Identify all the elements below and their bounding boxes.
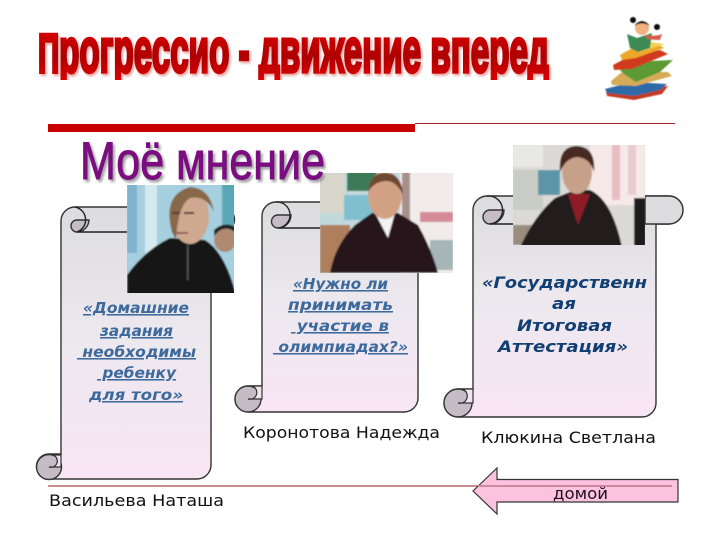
scarf — [646, 34, 662, 40]
red book — [613, 50, 668, 70]
photo: Светлана — [511, 143, 647, 248]
panel: scroll 1: ребенку — [97, 364, 177, 382]
icon: girl reading on a stack of books — [605, 17, 673, 100]
open green book — [627, 33, 652, 52]
arrow: home button — [473, 468, 678, 514]
question text: «Государственн — [482, 273, 647, 292]
curl top — [483, 210, 504, 224]
panel: scroll 1 — [36, 207, 234, 480]
question text: «Нужно ли — [293, 275, 388, 293]
panel: scroll 3: Итоговая — [517, 316, 612, 335]
orange book — [620, 43, 664, 60]
photo: Наташа — [125, 183, 237, 295]
panel: scroll 3 — [444, 196, 683, 417]
panel: scroll 1: необходимы — [77, 343, 196, 361]
panel: scroll 3: Аттестация» — [496, 337, 628, 356]
panel: scroll 2: участие в — [291, 317, 389, 335]
bottom book — [606, 86, 668, 100]
panel: scroll 2 — [235, 202, 430, 412]
curl bottom — [36, 454, 62, 480]
curl top — [71, 220, 89, 232]
panel: scroll 2: олимпиадах?» — [273, 338, 408, 356]
green book — [618, 60, 673, 82]
panel: scroll 1: для того» — [88, 386, 183, 404]
yellow book — [630, 42, 665, 52]
girl's head — [635, 21, 649, 35]
name: Клюкина Светлана: Клюкина Светлана — [481, 428, 656, 447]
curl bottom — [235, 386, 261, 412]
header rule — [48, 123, 675, 132]
photo: Надежда — [318, 171, 455, 275]
panel: scroll 3: ая — [552, 294, 576, 313]
panel: scroll 1: задания — [99, 322, 173, 340]
name: Коронотова Надежда: Коронотова Надежда — [243, 423, 440, 442]
subheading: Моё мнение — [80, 132, 325, 191]
curl bottom — [444, 389, 472, 417]
question text: «Домашние — [83, 299, 189, 317]
panel: scroll 2: принимать — [288, 296, 393, 314]
footer rule — [48, 485, 673, 487]
button label: домой — [553, 484, 608, 503]
tan book — [611, 72, 672, 86]
name: Васильева Наташа: Васильева Наташа — [49, 491, 224, 510]
curl top — [272, 215, 291, 228]
